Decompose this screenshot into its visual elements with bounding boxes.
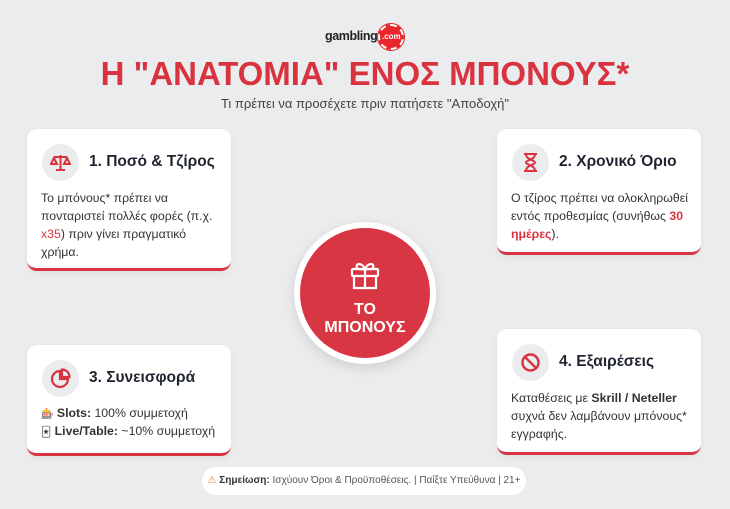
text: Το μπόνους* πρέπει να πονταριστεί πολλές φορές (π.χ. x35) πριν γίνει πραγματικό χρήμα. <box>41 191 212 259</box>
logo <box>325 23 405 51</box>
logo: gambling <box>325 29 377 43</box>
text: Καταθέσεις με Skrill / Neteller συχνά δεν λαμβάνουν μπόνους* εγγραφής. <box>511 391 687 441</box>
heading: 1. Ποσό & Τζίρος <box>89 153 215 170</box>
icon: prohibited <box>512 344 549 381</box>
text: 🎰 Slots: 100% συμμετοχή <box>41 406 188 420</box>
footer note <box>202 467 526 495</box>
heading: 4. Εξαιρέσεις <box>559 353 654 370</box>
panel: card 1 <box>27 129 231 271</box>
text <box>41 406 215 438</box>
text: 🃏 Live/Table: ~10% συμμετοχή <box>41 424 215 438</box>
icon: gift <box>350 262 380 290</box>
heading: 3. Συνεισφορά <box>89 369 195 386</box>
center circle <box>294 222 436 364</box>
label: ΜΠΟΝΟΥΣ <box>324 319 406 336</box>
icon: hourglass <box>512 144 549 181</box>
panel: card 4 <box>497 329 701 455</box>
icon: pie chart <box>42 360 79 397</box>
footer note: ⚠ Σημείωση: Ισχύουν Όροι & Προϋποθέσεις. | Παίξτε Υπεύθυνα | 21+ <box>208 475 520 486</box>
heading: 2. Χρονικό Όριο <box>559 153 677 170</box>
title: Η "ΑΝΑΤΟΜΙΑ" ΕΝΟΣ ΜΠΟΝΟΥΣ* <box>101 55 629 92</box>
panel: card 3 <box>27 345 231 456</box>
logo: .com <box>382 32 401 41</box>
label <box>324 301 406 336</box>
icon: scale <box>42 144 79 181</box>
text: Ο τζίρος πρέπει να ολοκληρωθεί εντός προθεσμίας (συνήθως 30 ημέρες). <box>511 191 688 241</box>
subtitle: Τι πρέπει να προσέχετε πριν πατήσετε "Αποδοχή" <box>221 96 509 111</box>
label: ΤΟ <box>354 301 376 318</box>
panel: card 2 <box>497 129 701 255</box>
